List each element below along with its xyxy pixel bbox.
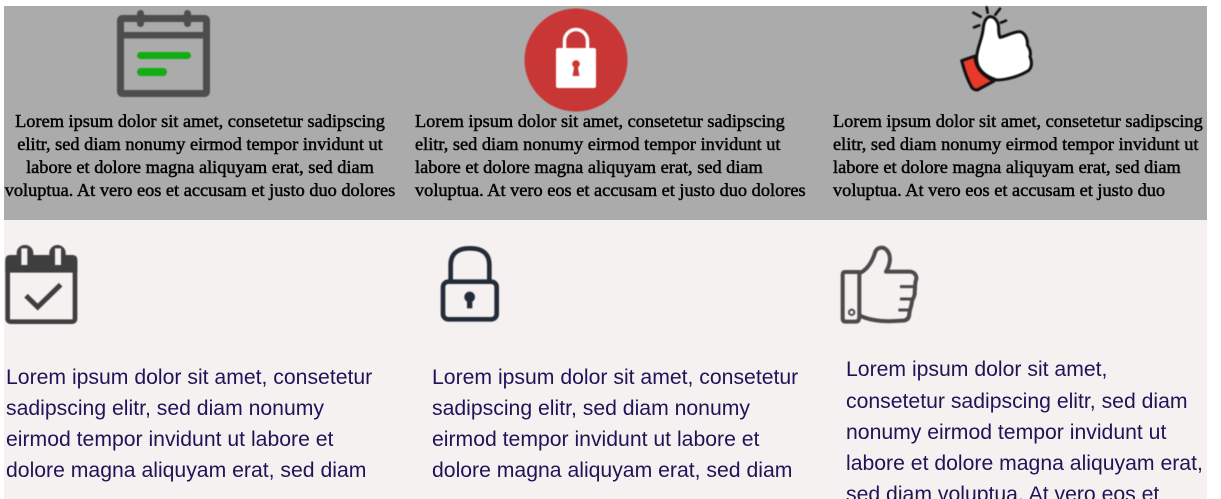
panel: bottom light band <box>4 220 1207 499</box>
panel: top grey band <box>4 6 1207 220</box>
text: bottom column 1: Lorem ipsum dolor sit amet, consetetur <box>6 366 372 389</box>
text: top column 2: voluptua. At vero eos et accusam et justo duo dolores <box>415 180 806 200</box>
icon: outlined padlock <box>440 245 500 322</box>
text: bottom column 1 <box>6 366 372 482</box>
text: top column 3: Lorem ipsum dolor sit amet, consetetur sadipscing <box>833 111 1203 131</box>
icon: cartoon thumbs up <box>960 5 1034 92</box>
text: bottom column 2: sadipscing elitr, sed diam nonumy <box>432 397 750 420</box>
text: bottom column 3: Lorem ipsum dolor sit amet, <box>846 358 1107 381</box>
text: bottom column 3 <box>846 358 1203 499</box>
icon: red circle padlock <box>524 8 628 112</box>
text: top column 3: voluptua. At vero eos et accusam et justo duo <box>833 180 1165 200</box>
text: bottom column 2: Lorem ipsum dolor sit amet, consetetur <box>432 366 798 389</box>
text: bottom column 3: labore et dolore magna aliquyam erat, <box>846 452 1203 475</box>
text: bottom column 3: nonumy eirmod tempor invidunt ut <box>846 421 1166 444</box>
text: top column 1: elitr, sed diam nonumy eirmod tempor invidunt ut <box>17 134 383 154</box>
text: bottom column 2: eirmod tempor invidunt ut labore et <box>432 428 759 451</box>
text: top column 2: elitr, sed diam nonumy eirmod tempor invidunt ut <box>415 134 780 154</box>
text: top column 2: Lorem ipsum dolor sit amet, consetetur sadipscing <box>415 111 785 131</box>
icon: green-lined calendar <box>116 10 211 98</box>
text: top column 1 <box>4 111 395 200</box>
text: top column 1: voluptua. At vero eos et accusam et justo duo dolores <box>5 180 395 200</box>
text: top column 1: Lorem ipsum dolor sit amet, consetetur sadipscing <box>15 111 385 131</box>
text: top column 3: labore et dolore magna aliquyam erat, sed diam <box>833 157 1181 177</box>
text: bottom column 3: consetetur sadipscing elitr, sed diam <box>846 390 1188 412</box>
text: top column 2: labore et dolore magna aliquyam erat, sed diam <box>415 157 763 177</box>
text: top column 3: elitr, sed diam nonumy eirmod tempor invidunt ut <box>833 134 1198 154</box>
text: bottom column 1: dolore magna aliquyam erat, sed diam <box>6 459 366 482</box>
text: bottom column 2 <box>432 366 798 482</box>
text: bottom column 1: eirmod tempor invidunt ut labore et <box>6 428 333 451</box>
icon: outlined thumbs up <box>840 244 920 324</box>
text: top column 2 <box>414 111 806 200</box>
text: bottom column 2: dolore magna aliquyam erat, sed diam <box>432 459 792 482</box>
text: top column 3 <box>832 111 1203 200</box>
text: bottom column 1: sadipscing elitr, sed diam nonumy <box>6 397 324 420</box>
icon: calendar with check <box>4 244 78 325</box>
text: top column 1: labore et dolore magna aliquyam erat, sed diam <box>26 157 374 177</box>
